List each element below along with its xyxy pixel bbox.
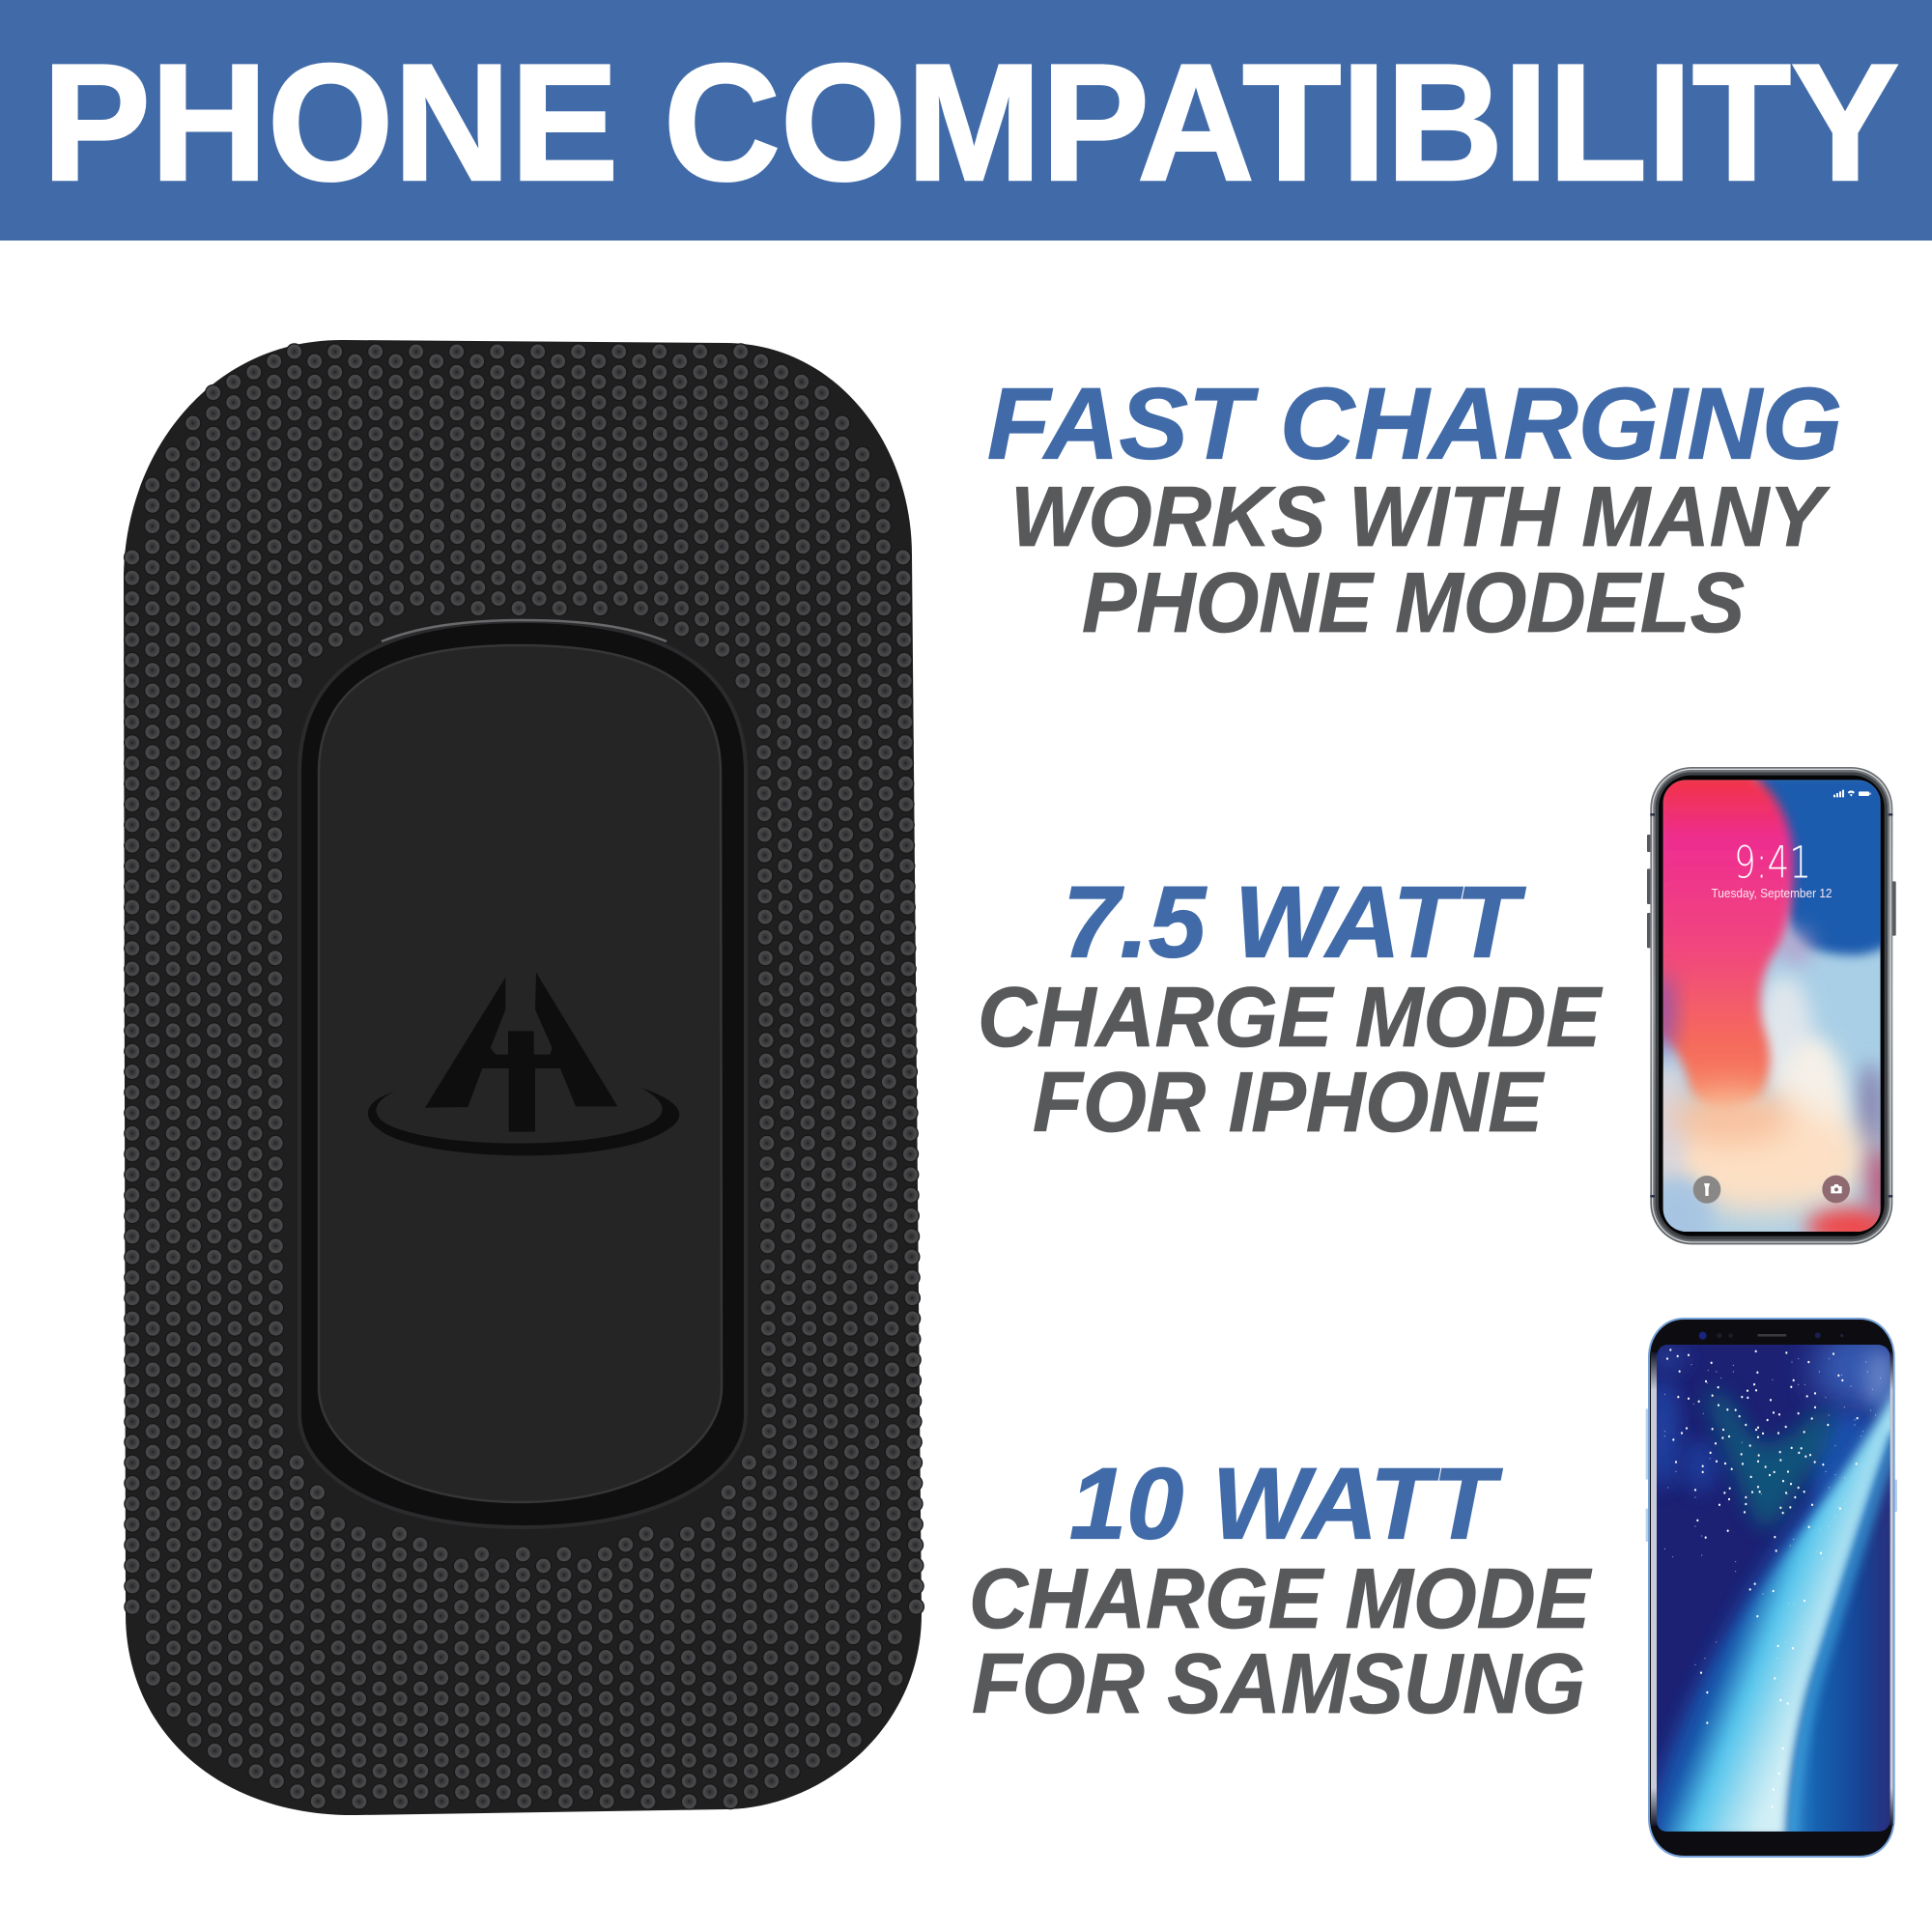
flashlight button (1693, 1176, 1720, 1204)
line 1: CHARGE MODE (969, 1550, 1592, 1646)
screen wallpaper (1657, 1345, 1890, 1832)
status icons (1833, 790, 1871, 797)
clock: 9:41 (1734, 838, 1811, 889)
phone frame (1649, 1319, 1894, 1857)
line 2: FOR IPHONE (1033, 1054, 1545, 1150)
line 2: PHONE MODELS (1082, 554, 1745, 650)
screen wallpaper (1663, 780, 1881, 1232)
title: PHONE COMPATIBILITY (43, 30, 1899, 215)
heading: 10 WATT (1069, 1447, 1503, 1561)
faint stars (1664, 1359, 1881, 1809)
pad dot texture (132, 352, 916, 1803)
pad body (124, 340, 922, 1815)
logo letters (425, 973, 617, 1132)
line 1: CHARGE MODE (978, 969, 1603, 1065)
icon: iphone (1642, 767, 1903, 1253)
antenna bands (1650, 814, 1892, 1196)
text block: fast charging (987, 367, 1842, 650)
header banner (0, 0, 1932, 241)
line 2: FOR SAMSUNG (972, 1635, 1585, 1731)
center plateau (319, 645, 722, 1502)
heading: 7.5 WATT (1063, 866, 1526, 980)
line 1: WORKS WITH MANY (1010, 469, 1831, 564)
camera button (1822, 1176, 1850, 1203)
icon: samsung phone (1642, 1319, 1913, 1857)
side buttons (1647, 835, 1896, 948)
text block: iphone charging (978, 866, 1603, 1150)
heading: FAST CHARGING (987, 367, 1842, 481)
phone frame (1650, 767, 1892, 1244)
top sensors (1699, 1332, 1843, 1340)
logo swoosh (368, 1088, 679, 1155)
text block: samsung charging (969, 1447, 1592, 1731)
recessed groove (299, 621, 746, 1527)
groove highlight (382, 620, 667, 641)
logo (368, 973, 679, 1155)
curved screen edges (1651, 1352, 1657, 1826)
bright stars (1667, 1350, 1858, 1806)
side buttons (1646, 1408, 1897, 1542)
date: Tuesday, September 12 (1711, 886, 1832, 900)
panel: wireless charging pad (124, 340, 922, 1815)
